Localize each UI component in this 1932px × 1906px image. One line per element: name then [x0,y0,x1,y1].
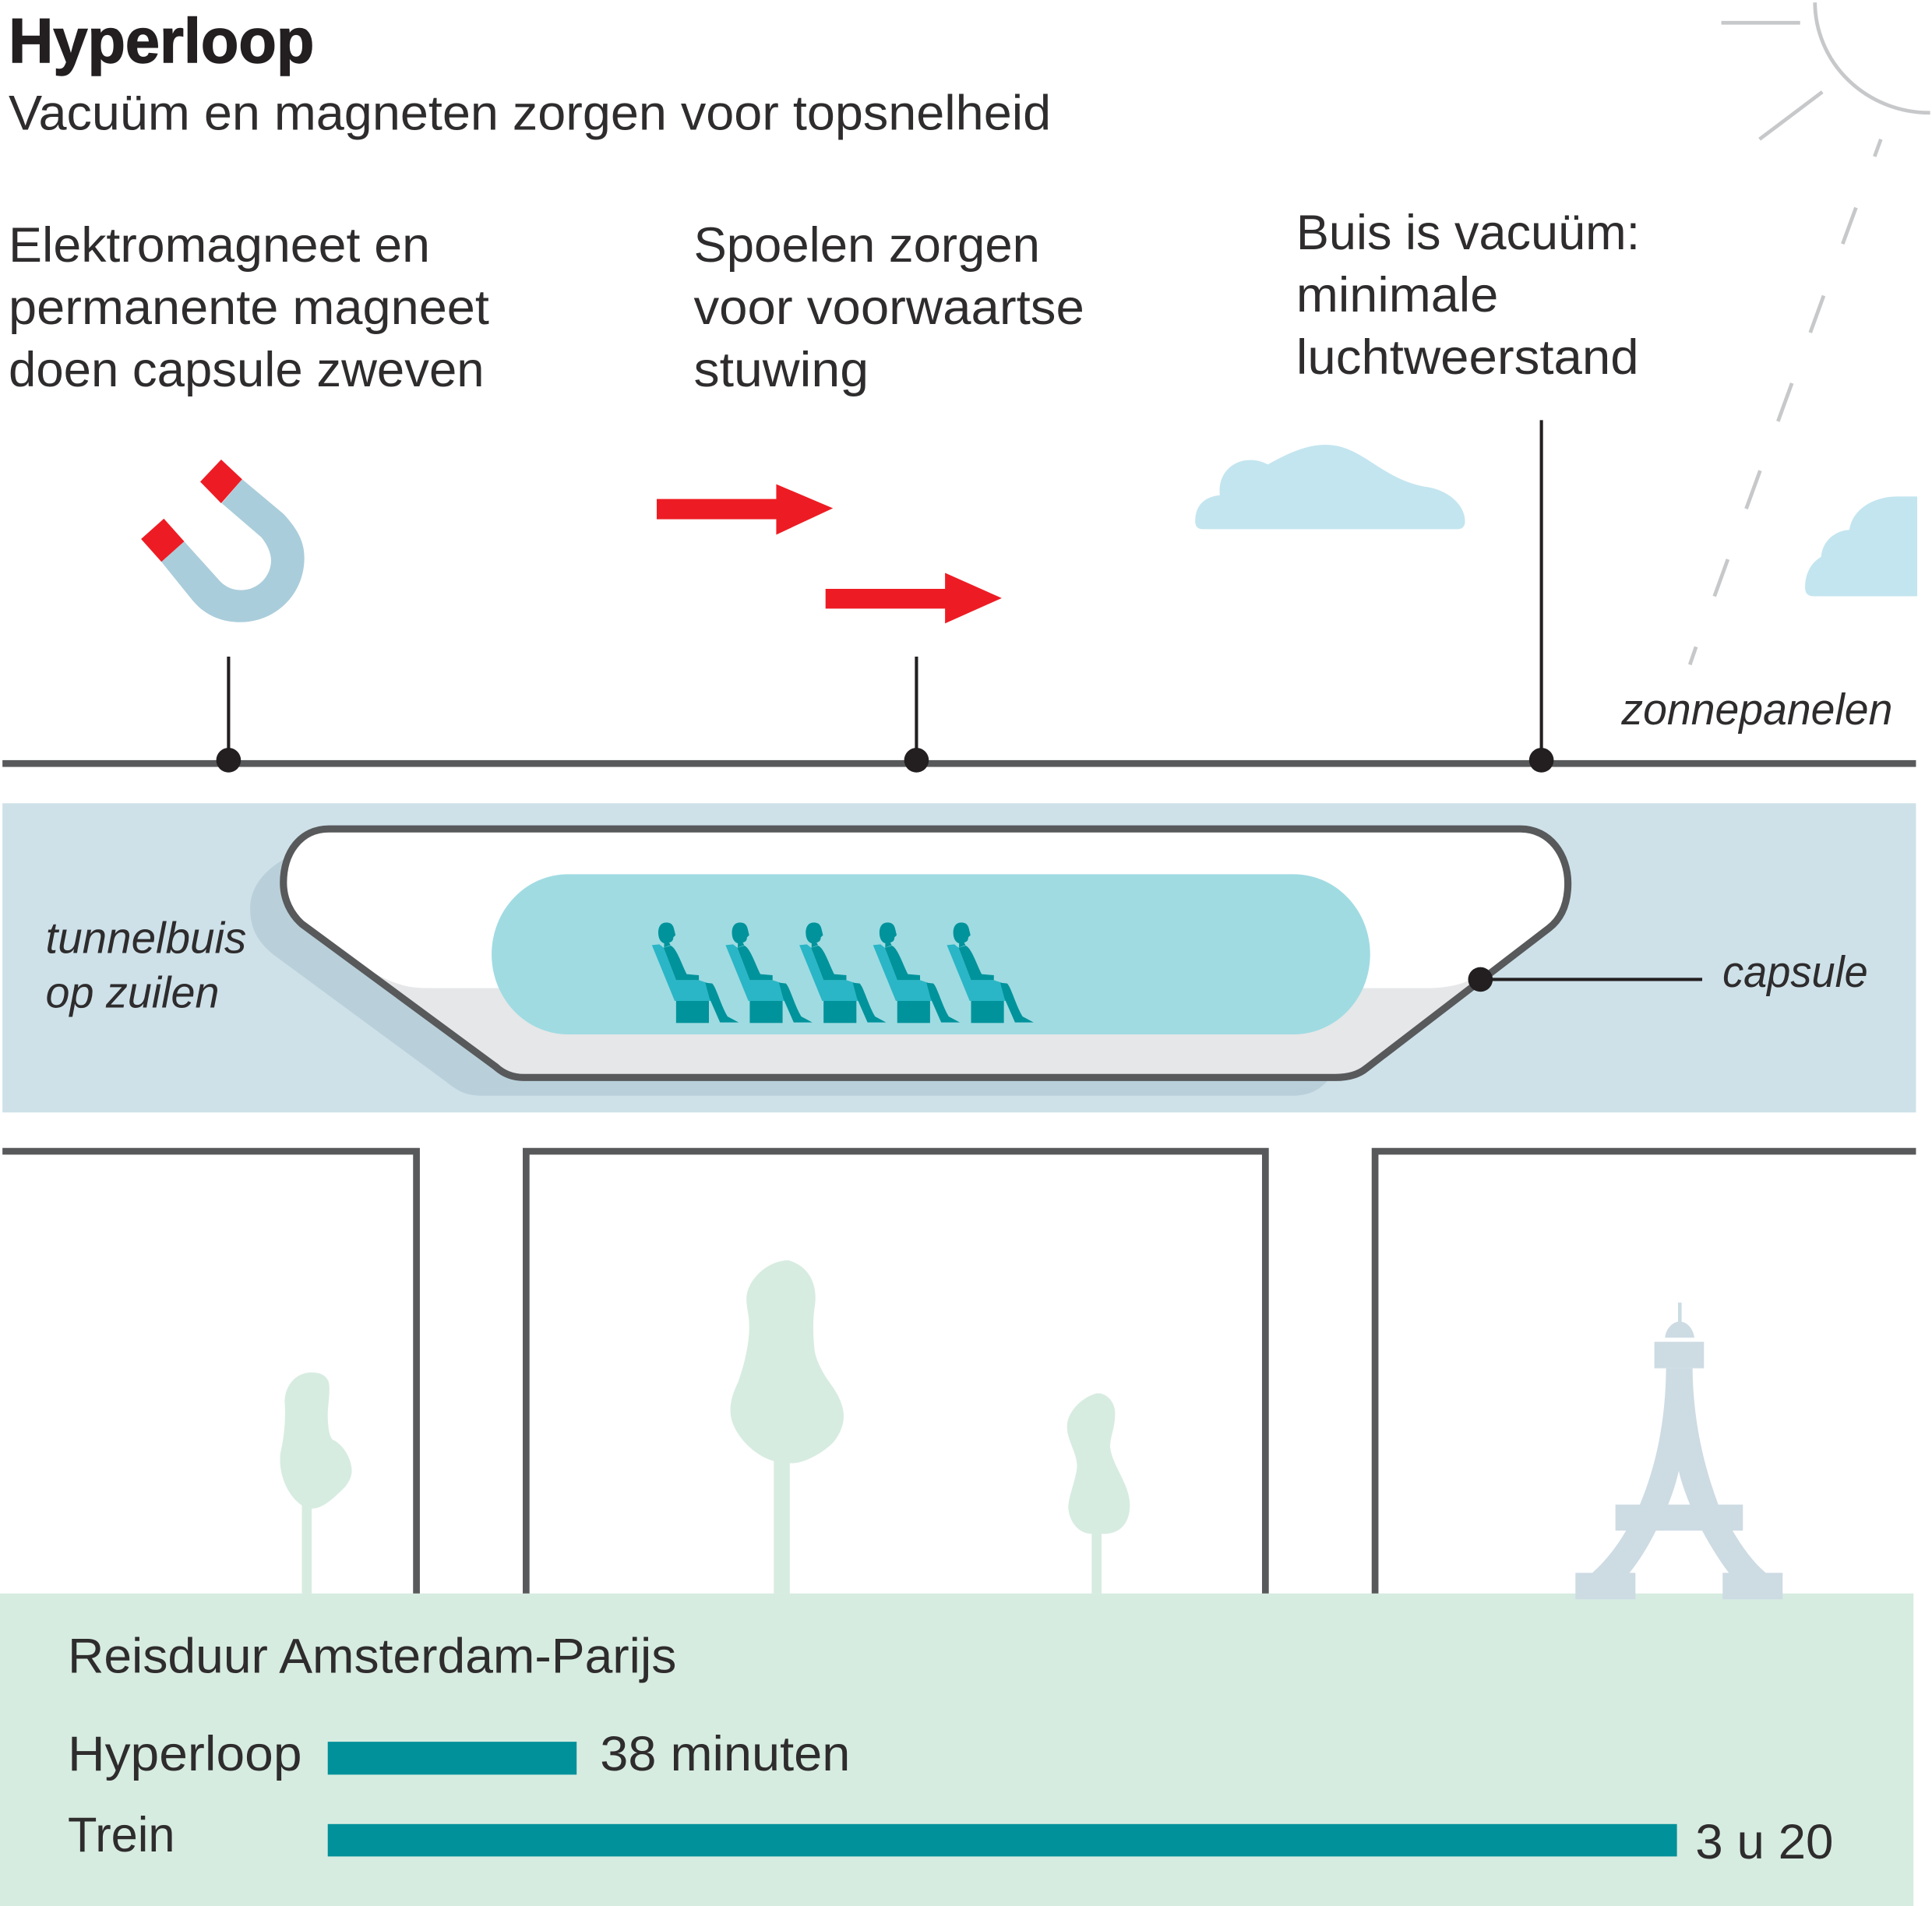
title: Hyperloop [9,6,314,76]
tube floor [366,968,1490,1077]
arrow: upper thrust [657,484,833,534]
seat 1 [652,922,739,1023]
chart heading: Reisduur Amsterdam-Parijs [68,1629,676,1683]
tree: centre tall [731,1260,844,1594]
tree: left [280,1372,352,1594]
text block: coils: stuwing [693,343,869,397]
tube interior [284,829,1568,1077]
label: tunnelbuis op zuilen [46,913,246,1017]
seat 4 [873,922,960,1023]
label: capsule: capsule [1722,947,1868,997]
capsule interior [492,874,1370,1034]
row: Hyperloop: Hyperloop [68,1727,301,1781]
text block: coils: voor voorwaartse [693,280,1084,335]
label: tunnelbuis op zuilen: op zuilen [46,967,220,1017]
pointer: capsule [1468,967,1702,992]
text block: coils: Spoelen zorgen [693,218,1040,273]
row: Trein [68,1808,1833,1869]
icon: horseshoe magnet [141,460,305,622]
tube outline [284,829,1568,1077]
pillar: right [1375,1151,1916,1594]
text block: vacuum: minimale [1296,268,1498,322]
seat 5 [947,922,1034,1023]
text block: vacuum: luchtweerstand [1296,330,1639,385]
tube shadow [250,856,1331,1096]
seat 3 [799,922,887,1023]
tree: centre small [1067,1393,1130,1594]
pillar: middle [526,1151,1265,1594]
row: Hyperloop [68,1727,850,1781]
arrow: lower thrust [826,573,1002,623]
text block: vacuum [1296,206,1640,385]
ground line [2,760,1916,767]
passengers in seats [652,922,1034,1023]
text block: vacuum: Buis is vacuüm: [1296,206,1640,260]
row: Hyperloop: 38 minuten [600,1727,850,1781]
icon: large cloud [1195,445,1465,529]
pointer: vacuum [1529,420,1553,773]
icon: Eiffel tower [1575,1302,1782,1599]
icon: small cloud [1805,496,1917,597]
row: Trein: Trein [68,1808,175,1862]
panel: tunnel band [2,803,1916,1112]
ground panel [0,1594,1913,1906]
icon: sun with rays [1722,2,1930,139]
row: Trein: 3 u 20 [1695,1815,1833,1869]
subtitle: Vacuüm en magneten zorgen voor topsnelheid [9,86,1051,141]
seat 2 [725,922,813,1023]
bar chart: travel time [68,1727,1833,1869]
label: zonnepanelen: zonnepanelen [1620,685,1892,735]
sunlight dashed ray [1690,139,1881,664]
text block: magnets: doen capsule zweven [9,343,485,397]
text block: magnets: Elektromagneet en [9,218,430,273]
pillar: left [2,1151,417,1594]
text block: magnets: permanente magneet [9,280,489,335]
pointer: coils [904,657,929,773]
label: tunnelbuis op zuilen: tunnelbuis [46,913,246,963]
text block: magnets [9,218,489,397]
pointer: magnets [217,657,241,773]
text block: coils [693,218,1084,397]
